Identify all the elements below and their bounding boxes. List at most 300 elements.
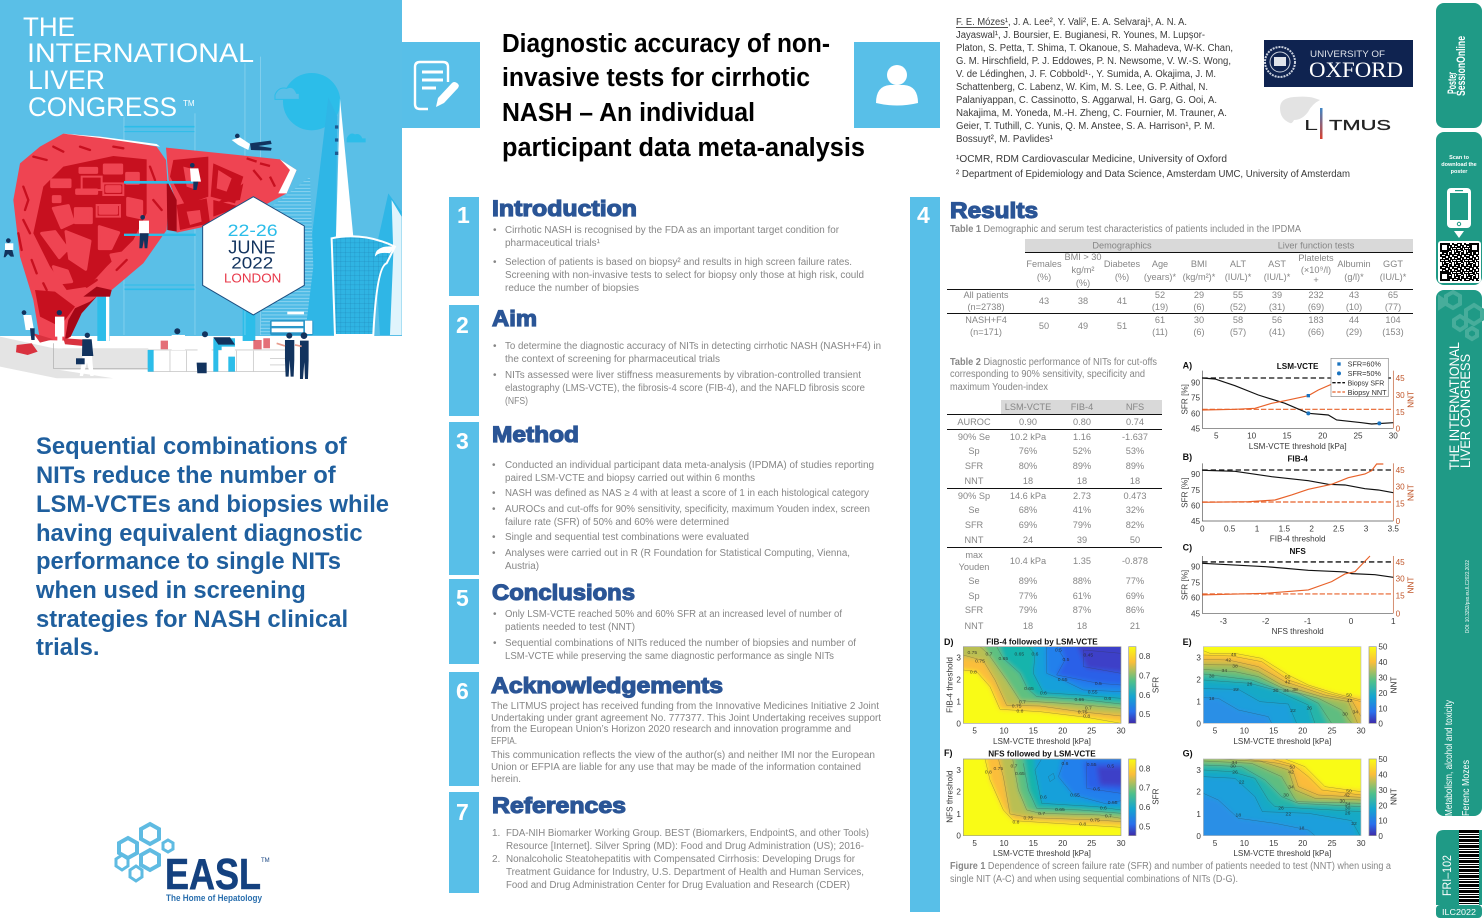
section 3: Method: Austria)	[505, 561, 539, 572]
table 2: diagnostic performance: 24	[1023, 535, 1033, 545]
heatmap G: NNT for NFS then LSM-VCTE: 42	[1344, 793, 1350, 799]
table 2: diagnostic performance: 90% Sp	[958, 491, 990, 501]
section 2: Aim	[449, 305, 881, 416]
table 2: diagnostic performance: SFR	[965, 461, 984, 471]
QR code	[1438, 241, 1481, 283]
heatmap G: NNT for NFS then LSM-VCTE: 30	[1345, 805, 1351, 811]
colorbar F: 0.7	[1139, 784, 1151, 793]
heatmap D: FIB-4 followed by LSM-VCTE SFR: 0.5	[1055, 648, 1062, 654]
table 2: diagnostic performance: 88%	[1073, 576, 1091, 586]
heatmap D: FIB-4 followed by LSM-VCTE SFR: 3	[956, 654, 961, 663]
chart C: NFS line chart: 60	[1191, 594, 1201, 603]
section 3: Method: NASH was defined as NAS ≥ 4 with at least a score of 1 in each histological category	[505, 488, 869, 499]
heatmap G: NNT for NFS then LSM-VCTE: 22	[1239, 779, 1245, 785]
heatmap F: NFS followed by LSM-VCTE SFR: 0.7	[1038, 811, 1045, 817]
table 2: diagnostic performance: 18	[1023, 476, 1033, 486]
heatmap F: NFS followed by LSM-VCTE SFR: NFS followed by LSM-VCTE	[988, 750, 1096, 759]
authors list: F. E. Mózes¹, J. A. Lee², Y. Vali², E. A. Selvaraj¹, A. N. A.	[956, 17, 1187, 28]
table 1: patient characteristics: Albumin	[1337, 259, 1371, 269]
chart C: NFS line chart: -2	[1262, 617, 1270, 626]
table 2: diagnostic performance	[947, 357, 1162, 631]
key message: having equivalent diagnostic	[36, 520, 363, 547]
congress title: INTERNATIONAL	[27, 38, 254, 68]
heatmap D: FIB-4 followed by LSM-VCTE SFR: 0.5	[1095, 681, 1102, 687]
heatmap G: NNT for NFS then LSM-VCTE: 26	[1345, 811, 1351, 817]
section 7: References: 2.	[492, 854, 500, 865]
sidebar: scan to download with QR code: download the	[1441, 162, 1477, 168]
table 1: patient characteristics: Demographics	[1092, 240, 1152, 250]
table 1: patient characteristics: Diabetes	[1104, 259, 1141, 269]
heatmap E: NNT for FIB-4 then LSM-VCTE: 15	[1269, 727, 1279, 736]
heatmap G: NNT for NFS then LSM-VCTE: 34	[1345, 801, 1351, 807]
table 2: diagnostic performance: 77%	[1126, 576, 1144, 586]
heatmap E: NNT for FIB-4 then LSM-VCTE: 0	[1196, 720, 1201, 729]
section 4: Results heading: Results	[950, 198, 1038, 223]
heatmap D: FIB-4 followed by LSM-VCTE SFR: 0.7	[1019, 699, 1026, 705]
table 2 caption: corresponding to 90% sensitivity, specificity and	[950, 369, 1145, 380]
logo: EASL: The Home of Hepatology	[166, 893, 262, 903]
table 1: patient characteristics: +	[1313, 275, 1319, 285]
chart A: LSM-VCTE line chart: LSM-VCTE threshold [kPa]	[1249, 442, 1347, 451]
congress title	[23, 12, 254, 122]
sidebar: poster number and barcode: ILC2022	[1442, 907, 1476, 917]
chart C: NFS line chart: -3	[1220, 617, 1227, 626]
section 3: Method: Single and sequential test combinations were evaluated	[505, 532, 749, 543]
table 1: patient characteristics: (31)	[1269, 302, 1285, 312]
authors list: V. de Lédinghen, J. F. Cobbold¹·, Y. Sumida, A. Okajima, J. M.	[956, 69, 1216, 80]
table 2: diagnostic performance: 2.73	[1073, 491, 1091, 501]
chart A: LSM-VCTE line chart: 15	[1396, 408, 1405, 417]
heatmap E: NNT for FIB-4 then LSM-VCTE: 50	[1285, 675, 1291, 681]
section 2: Aim: NITs assessed were liver stiffness measurements by vibration-controlled transient	[505, 370, 861, 381]
heatmap D: FIB-4 followed by LSM-VCTE SFR: LSM-VCTE threshold [kPa]	[993, 737, 1091, 746]
heatmap G: NNT for NFS then LSM-VCTE: 42	[1288, 769, 1294, 775]
table 2: diagnostic performance: 0.80	[1073, 417, 1091, 427]
colorbar G	[1369, 755, 1399, 841]
table 1: patient characteristics: 43	[1039, 296, 1049, 306]
colorbar G: 30	[1378, 786, 1388, 795]
heatmap F: NFS followed by LSM-VCTE SFR: 5	[972, 839, 977, 848]
heatmap G: NNT for NFS then LSM-VCTE: LSM-VCTE threshold [kPa]	[1233, 849, 1331, 858]
chart B: FIB-4 line chart: 45	[1396, 466, 1405, 475]
heatmap E: NNT for FIB-4 then LSM-VCTE: 42	[1347, 698, 1353, 704]
table 1: patient characteristics: NASH+F4	[965, 315, 1007, 325]
heatmap F: NFS followed by LSM-VCTE SFR: 0.8	[985, 769, 992, 775]
date hexagon: LONDON	[224, 272, 281, 286]
section 6: Acknowledgements: This communication reflects the view of the author(s) and neither IMI nor the European	[491, 750, 875, 761]
sidebar: poster number and barcode	[1436, 830, 1482, 918]
table 2: diagnostic performance: -0.878	[1122, 556, 1148, 566]
section 5: Conclusions: patients needed to test (NNT)	[505, 622, 635, 633]
chart A: LSM-VCTE line chart: 0	[1396, 424, 1401, 433]
chart C: NFS line chart: -1	[1304, 617, 1312, 626]
table 1: patient characteristics	[947, 224, 1413, 337]
heatmap E: NNT for FIB-4 then LSM-VCTE: 5	[1213, 727, 1218, 736]
table 2: diagnostic performance: Se	[968, 576, 980, 586]
heatmap E: NNT for FIB-4 then LSM-VCTE: 42	[1226, 657, 1231, 663]
heatmap E: NNT for FIB-4 then LSM-VCTE: 22	[1290, 708, 1296, 714]
key message: trials.	[36, 634, 100, 661]
heatmap E: NNT for FIB-4 then LSM-VCTE: 26	[1247, 682, 1253, 688]
section 2: Aim: (NFS)	[505, 396, 528, 407]
section 1: Introduction: •	[493, 257, 497, 268]
logo: University of Oxford: UNIVERSITY OF	[1310, 49, 1386, 59]
table 2: diagnostic performance: Se	[968, 505, 980, 515]
table 2: diagnostic performance: 50	[1130, 535, 1140, 545]
chart B: FIB-4 line chart: 1	[1255, 524, 1260, 533]
key message: strategies for NASH clinical	[36, 606, 348, 633]
section 7: References: Food and Drug Administration Center for Drug Evaluation and Research (CDER)	[506, 880, 850, 891]
section 6: Acknowledgements: Acknowledgements	[491, 673, 723, 698]
chart C: NFS line chart: 0	[1396, 609, 1401, 618]
chart A legend: Biopsy SFR	[1348, 379, 1385, 388]
table 2: diagnostic performance: 80%	[1019, 461, 1037, 471]
key message: NITs reduce the number of	[36, 462, 336, 489]
table 1: patient characteristics: (6)	[1193, 327, 1205, 337]
ground and lab benches	[0, 333, 286, 378]
congress title: LIVER	[28, 65, 105, 95]
table 2: diagnostic performance: 41%	[1073, 505, 1091, 515]
table 1: patient characteristics: (6)	[1193, 302, 1205, 312]
section 5: Conclusions: •	[493, 609, 497, 620]
table 1: patient characteristics: 50	[1039, 321, 1049, 331]
table 1: patient characteristics: Platelets	[1298, 253, 1334, 263]
colorbar E: 10	[1378, 704, 1388, 713]
heatmap D: FIB-4 followed by LSM-VCTE SFR: 0.7	[986, 652, 993, 658]
heatmap F: NFS followed by LSM-VCTE SFR: 0.65	[1055, 807, 1065, 813]
section 5: Conclusions: Sequential combinations of NITs reduced the number of biopsies and number of	[505, 638, 856, 649]
logo: LITMUS	[1280, 97, 1391, 139]
colorbar G: 50	[1378, 755, 1388, 764]
figure 1 caption	[950, 861, 1391, 885]
table 2: diagnostic performance: AUROC	[957, 417, 991, 427]
heatmap F: NFS followed by LSM-VCTE SFR: 10	[999, 839, 1009, 848]
heatmap G: NNT for NFS then LSM-VCTE: 15	[1269, 839, 1279, 848]
colorbar G: 40	[1378, 770, 1388, 779]
table 1: patient characteristics: (69)	[1308, 302, 1324, 312]
table 2: diagnostic performance: 82%	[1126, 520, 1144, 530]
heatmap D: FIB-4 followed by LSM-VCTE SFR: 5	[972, 727, 977, 736]
colorbar D: 0.6	[1139, 691, 1151, 700]
heatmap F: NFS followed by LSM-VCTE SFR: 3	[956, 766, 961, 775]
table 2: diagnostic performance: 18	[1077, 621, 1087, 631]
table 2: diagnostic performance: 14.6 kPa	[1010, 491, 1047, 501]
table 2 caption: maximum Youden-index	[950, 382, 1048, 393]
table 1: patient characteristics: (n=2738)	[967, 302, 1005, 312]
chart C: NFS line chart: 1	[1391, 617, 1396, 626]
heatmap D: FIB-4 followed by LSM-VCTE SFR: 0.55	[1058, 677, 1068, 683]
icon: note and pencil square	[402, 42, 480, 128]
chart A: LSM-VCTE line chart: 45	[1396, 374, 1405, 383]
heatmap D: FIB-4 followed by LSM-VCTE SFR: 10	[999, 727, 1009, 736]
chart B: FIB-4 line chart: 3.5	[1388, 524, 1399, 533]
chart A legend: SFR=50%	[1348, 369, 1381, 378]
heatmap G: NNT for NFS then LSM-VCTE: 50	[1290, 764, 1295, 770]
key message	[35, 433, 389, 661]
chart C: NFS line chart: 75	[1191, 578, 1201, 587]
heatmap E: NNT for FIB-4 then LSM-VCTE: 34	[1353, 709, 1358, 715]
section 1: Introduction: 1	[457, 202, 470, 228]
table 2 caption: Table 2 Diagnostic performance of NITs for cut-offs	[950, 357, 1157, 368]
sidebar: scan to download with QR code	[1436, 132, 1482, 285]
heatmap F: NFS followed by LSM-VCTE SFR: NFS threshold	[946, 770, 955, 823]
heatmap D: FIB-4 followed by LSM-VCTE SFR: 25	[1087, 727, 1097, 736]
colorbar F: SFR	[1151, 788, 1160, 805]
section 3: Method: 3	[456, 428, 469, 454]
table 1: patient characteristics: 39	[1272, 290, 1282, 300]
heatmap E: NNT for FIB-4 then LSM-VCTE: 34	[1283, 688, 1289, 694]
table 2: diagnostic performance: 89%	[1019, 576, 1037, 586]
chart B: FIB-4 line chart: 15	[1396, 499, 1405, 508]
chart B: FIB-4 line chart: B)	[1183, 452, 1192, 462]
poster title	[502, 30, 865, 162]
chart B: FIB-4 line chart: SFR [%]	[1181, 477, 1190, 508]
heatmap G: NNT for NFS then LSM-VCTE: 25	[1327, 839, 1337, 848]
colorbar F: 0.8	[1139, 764, 1151, 773]
table 1: patient characteristics: 51	[1117, 321, 1127, 331]
heatmap F: NFS followed by LSM-VCTE SFR	[944, 743, 1160, 858]
colorbar G: 10	[1378, 817, 1388, 826]
heatmap D: FIB-4 followed by LSM-VCTE SFR	[944, 630, 1160, 746]
chart B: FIB-4 line chart: NNT	[1407, 484, 1416, 501]
table 1: patient characteristics: Age	[1152, 259, 1168, 269]
date hexagon: 22-26	[228, 221, 278, 240]
chart A: LSM-VCTE line chart: 20	[1318, 432, 1328, 441]
sidebar: scan to download with QR code: Scan to	[1449, 155, 1470, 161]
section 3: Method: •	[492, 488, 496, 499]
heatmap E: NNT for FIB-4 then LSM-VCTE: 1	[1196, 698, 1201, 707]
chart C: NFS line chart: NFS	[1289, 547, 1306, 556]
table 2: diagnostic performance: Sp	[968, 446, 980, 456]
table 2: diagnostic performance: NFS	[1126, 402, 1144, 412]
heatmap D: FIB-4 followed by LSM-VCTE SFR: FIB-4 threshold	[946, 657, 955, 713]
heatmap F: NFS followed by LSM-VCTE SFR: 0.6	[1062, 761, 1069, 767]
colorbar D	[1129, 647, 1160, 723]
sidebar: Poster Session Online: SessionOnline	[1454, 36, 1468, 96]
table 2: diagnostic performance: 76%	[1019, 446, 1037, 456]
heatmap G: NNT for NFS then LSM-VCTE: 10	[1240, 839, 1249, 848]
table 2: diagnostic performance: FIB-4	[1071, 402, 1093, 412]
section 5: Conclusions: LSM-VCTE while preserving the same diagnostic performance as single NITs	[505, 651, 834, 662]
chart B: FIB-4 line chart	[1181, 452, 1416, 543]
table 2: diagnostic performance: LSM-VCTE	[1005, 402, 1051, 412]
section 3: Method: •	[492, 548, 496, 559]
heatmap F: NFS followed by LSM-VCTE SFR: 0.65	[1015, 771, 1025, 777]
heatmap E: NNT for FIB-4 then LSM-VCTE: 25	[1327, 727, 1337, 736]
table 1: patient characteristics: 55	[1233, 290, 1243, 300]
section 6: Acknowledgements: Union or EFPIA are liable for any use that may be made of the information contained	[491, 762, 861, 773]
table 2: diagnostic performance: 87%	[1073, 605, 1091, 615]
colorbar F	[1129, 759, 1160, 836]
table 1: patient characteristics: (11)	[1152, 327, 1168, 337]
table 2: diagnostic performance: 21	[1130, 621, 1140, 631]
heatmap E: NNT for FIB-4 then LSM-VCTE: 38	[1292, 687, 1298, 693]
table 2: diagnostic performance: 18	[1130, 476, 1140, 486]
section 1: Introduction: Selection of patients is based on biopsy² and results in high screen failure rates.	[505, 257, 852, 268]
section 5: Conclusions: 5	[456, 585, 469, 611]
table 1: patient characteristics: (77)	[1385, 302, 1401, 312]
heatmap F: NFS followed by LSM-VCTE SFR: 0	[956, 832, 961, 841]
table 1: patient characteristics: (n=171)	[970, 327, 1002, 337]
heatmap G: NNT for NFS then LSM-VCTE: 18	[1236, 813, 1241, 819]
chart A: LSM-VCTE line chart: SFR [%]	[1181, 384, 1190, 415]
section 3: Method: AUROCs and cut-offs for 90% sensitivity, specificity, maximum Youden index, screen	[505, 504, 870, 515]
heatmap F: NFS followed by LSM-VCTE SFR: LSM-VCTE threshold [kPa]	[993, 849, 1091, 858]
section 7: References: Nonalcoholic Steatohepatitis with Compensated Cirrhosis: Developing Drugs for	[506, 854, 856, 865]
heatmap G: NNT for NFS then LSM-VCTE: 3	[1196, 766, 1201, 775]
section 2: Aim: •	[493, 370, 497, 381]
figure 1 caption: single NIT (A-C) and when using sequential combinations of NITs (D-G).	[950, 874, 1238, 885]
table 1: patient characteristics: BMI > 30	[1064, 252, 1102, 262]
table 1: patient characteristics: (years)*	[1144, 272, 1176, 282]
icon: phone	[1447, 188, 1471, 228]
key message: performance to single NITs	[36, 548, 341, 575]
chart B: FIB-4 line chart: 1.5	[1279, 524, 1290, 533]
key message: LSM-VCTEs and biopsies while	[36, 491, 389, 518]
table 2: diagnostic performance: Youden	[959, 562, 989, 572]
heatmap F: NFS followed by LSM-VCTE SFR: 0.75	[1090, 817, 1100, 823]
authors list: Geier, T. Tuthill, C. Yunis, Q. M. Anstee, S. A. Harrison¹, P. M.	[956, 121, 1215, 132]
table 1: patient characteristics: (%)	[1037, 272, 1051, 282]
sidebar: congress title, topic and author: LIVER CONGRESS	[1458, 354, 1473, 468]
table 1: patient characteristics: All patients	[964, 290, 1009, 300]
section 3: Method: Analyses were carried out in R (R Foundation for Statistical Computing, Vienna,	[505, 548, 850, 559]
table 2: diagnostic performance: NNT	[965, 476, 984, 486]
heatmap F: NFS followed by LSM-VCTE SFR: 20	[1058, 839, 1068, 848]
heatmap G: NNT for NFS then LSM-VCTE: 22	[1286, 812, 1291, 818]
section 1: Introduction: Cirrhotic NASH is recognised by the FDA as an important target condition for	[505, 225, 840, 236]
chart A: LSM-VCTE line chart: A)	[1183, 360, 1192, 370]
section 7: References	[449, 792, 869, 893]
heatmap D: FIB-4 followed by LSM-VCTE SFR: 0.55	[1088, 689, 1098, 695]
heatmap E: NNT for FIB-4 then LSM-VCTE: LSM-VCTE threshold [kPa]	[1233, 737, 1331, 746]
section 6: Acknowledgements	[449, 672, 881, 786]
table 2: diagnostic performance: 53%	[1126, 446, 1144, 456]
logo: LITMUS: TMUS	[1329, 117, 1391, 134]
chart C: NFS line chart: 0	[1349, 617, 1354, 626]
section 7: References: Treatment Guidance for Industry, U.S. Department of Health and Human Services,	[506, 867, 864, 878]
heatmap F: NFS followed by LSM-VCTE SFR: 0.6	[1040, 794, 1047, 800]
heatmap G: NNT for NFS then LSM-VCTE: 5	[1213, 839, 1218, 848]
table 2: diagnostic performance: 79%	[1019, 605, 1037, 615]
logo: LITMUS: L	[1304, 117, 1318, 134]
chart B: FIB-4 line chart: FIB-4 threshold	[1270, 534, 1326, 543]
heatmap D: FIB-4 followed by LSM-VCTE SFR: 2	[956, 675, 961, 684]
table 1: patient characteristics: 43	[1349, 290, 1359, 300]
table 1: patient characteristics: (%)	[1115, 272, 1129, 282]
table 2: diagnostic performance: max	[965, 550, 983, 560]
chart A: LSM-VCTE line chart: 5	[1214, 432, 1219, 441]
heatmap E: NNT for FIB-4 then LSM-VCTE: 22	[1233, 687, 1239, 693]
sidebar: congress title, topic and author	[1436, 290, 1482, 816]
section 3: Method: •	[492, 460, 496, 471]
table 1: patient characteristics: (kg/m²)*	[1183, 272, 1216, 282]
chart B: FIB-4 line chart: 60	[1191, 501, 1201, 510]
table 2: diagnostic performance: 0.90	[1019, 417, 1037, 427]
table 2: diagnostic performance: 0.473	[1124, 491, 1146, 501]
heatmap G: NNT for NFS then LSM-VCTE: 26	[1232, 769, 1238, 775]
chart C: NFS line chart: C)	[1183, 543, 1192, 553]
colorbar E: 30	[1378, 674, 1388, 683]
chart C: NFS line chart: NFS threshold	[1272, 627, 1324, 636]
table 1: patient characteristics: (66)	[1308, 327, 1324, 337]
heatmap E: NNT for FIB-4 then LSM-VCTE: 46	[1231, 652, 1237, 658]
heatmap E: NNT for FIB-4 then LSM-VCTE: 3	[1196, 654, 1201, 663]
table 1: patient characteristics: (%)	[1076, 278, 1090, 288]
heatmap E: NNT for FIB-4 then LSM-VCTE	[1183, 630, 1399, 746]
heatmap G: NNT for NFS then LSM-VCTE: 26	[1278, 805, 1284, 811]
heatmap D: FIB-4 followed by LSM-VCTE SFR: 0.6	[1104, 696, 1111, 702]
colorbar G: NNT	[1390, 788, 1399, 805]
date hexagon: JUNE	[228, 236, 276, 257]
date hexagon: 2022	[231, 254, 273, 273]
colorbar F: 0.5	[1139, 822, 1151, 831]
heatmap D: FIB-4 followed by LSM-VCTE SFR: 0.65	[998, 656, 1008, 662]
colorbar D: 0.8	[1139, 652, 1151, 661]
chart C: NFS line chart: 45	[1396, 558, 1405, 567]
table 2: diagnostic performance: 79%	[1073, 520, 1091, 530]
heatmap D: FIB-4 followed by LSM-VCTE SFR: 0.8	[1083, 714, 1090, 720]
heatmap G: NNT for NFS then LSM-VCTE: 18	[1299, 825, 1305, 831]
chart B: FIB-4 line chart: 3	[1364, 524, 1369, 533]
chart A: LSM-VCTE line chart: 25	[1353, 432, 1363, 441]
table 1: patient characteristics: BMI	[1191, 259, 1207, 269]
heatmap E: NNT for FIB-4 then LSM-VCTE: 38	[1232, 664, 1238, 670]
heatmap D: FIB-4 followed by LSM-VCTE SFR: 30	[1116, 727, 1126, 736]
congress title: CONGRESS	[28, 92, 177, 122]
heatmap D: FIB-4 followed by LSM-VCTE SFR: 0.75	[1012, 704, 1022, 710]
key message: Sequential combinations of	[36, 433, 347, 460]
heatmap D: FIB-4 followed by LSM-VCTE SFR: 0.75	[967, 650, 977, 656]
table 1: patient characteristics: Liver function tests	[1278, 240, 1355, 250]
key message: when used in screening	[35, 577, 306, 604]
poster title: Diagnostic accuracy of non-	[502, 30, 830, 58]
heatmap G: NNT for NFS then LSM-VCTE: 20	[1298, 839, 1308, 848]
heatmap E: NNT for FIB-4 then LSM-VCTE: 50	[1346, 693, 1352, 699]
heatmap E: NNT for FIB-4 then LSM-VCTE: 26	[1307, 705, 1312, 711]
table 1: patient characteristics: (IU/L)*	[1225, 272, 1252, 282]
logo: EASL	[116, 824, 270, 903]
authors list: Palaniyappan, C. Cassinotto, S. Aggarwal, H. Garg, G. Ooi, A.	[956, 95, 1217, 106]
chart A: LSM-VCTE line chart: 75	[1191, 394, 1201, 403]
heatmap F: NFS followed by LSM-VCTE SFR: 25	[1087, 839, 1097, 848]
table 1: patient characteristics: (IU/L)*	[1380, 272, 1407, 282]
colorbar E: 20	[1378, 689, 1388, 698]
table 1: patient characteristics: 183	[1308, 315, 1324, 325]
figure 1 caption: Figure 1 Dependence of screen failure rate (SFR) and number of patients needed to test (NNT) when using a	[950, 861, 1391, 872]
heatmap D: FIB-4 followed by LSM-VCTE SFR: 0.8	[970, 670, 977, 676]
heatmap E: NNT for FIB-4 then LSM-VCTE: 30	[1342, 711, 1348, 717]
section 6: Acknowledgements: from the European Union’s Horizon 2020 research and innovation programme and	[491, 724, 851, 735]
authors list: Platon, S. Petta, T. Shima, T. Okanoue, S. Mahadeva, W-K. Chan,	[956, 43, 1233, 54]
table 1: patient characteristics: Females	[1026, 259, 1062, 269]
heatmap F: NFS followed by LSM-VCTE SFR: 0.8	[1079, 822, 1086, 828]
heatmap D: FIB-4 followed by LSM-VCTE SFR: 0.75	[975, 659, 985, 665]
table 1: patient characteristics: 58	[1233, 315, 1243, 325]
table 1: patient characteristics: (41)	[1269, 327, 1285, 337]
section 1: Introduction: reduce the number of biopsies	[505, 283, 639, 294]
heatmap G: NNT for NFS then LSM-VCTE: G)	[1183, 749, 1193, 759]
heatmap F: NFS followed by LSM-VCTE SFR: 0.7	[1105, 814, 1112, 820]
section 1: Introduction	[449, 196, 864, 296]
table 1: patient characteristics: 49	[1078, 321, 1088, 331]
chart A: LSM-VCTE line chart: 10	[1247, 432, 1257, 441]
table 1: patient characteristics: (10)	[1346, 302, 1362, 312]
table 1: patient characteristics: 61	[1155, 315, 1165, 325]
sidebar: congress title, topic and author: DOI: 10.3252/pso.eu.ILC2022.2022	[1465, 560, 1471, 633]
heatmap G: NNT for NFS then LSM-VCTE: 34	[1288, 785, 1294, 791]
chart A: LSM-VCTE line chart	[1181, 358, 1416, 451]
